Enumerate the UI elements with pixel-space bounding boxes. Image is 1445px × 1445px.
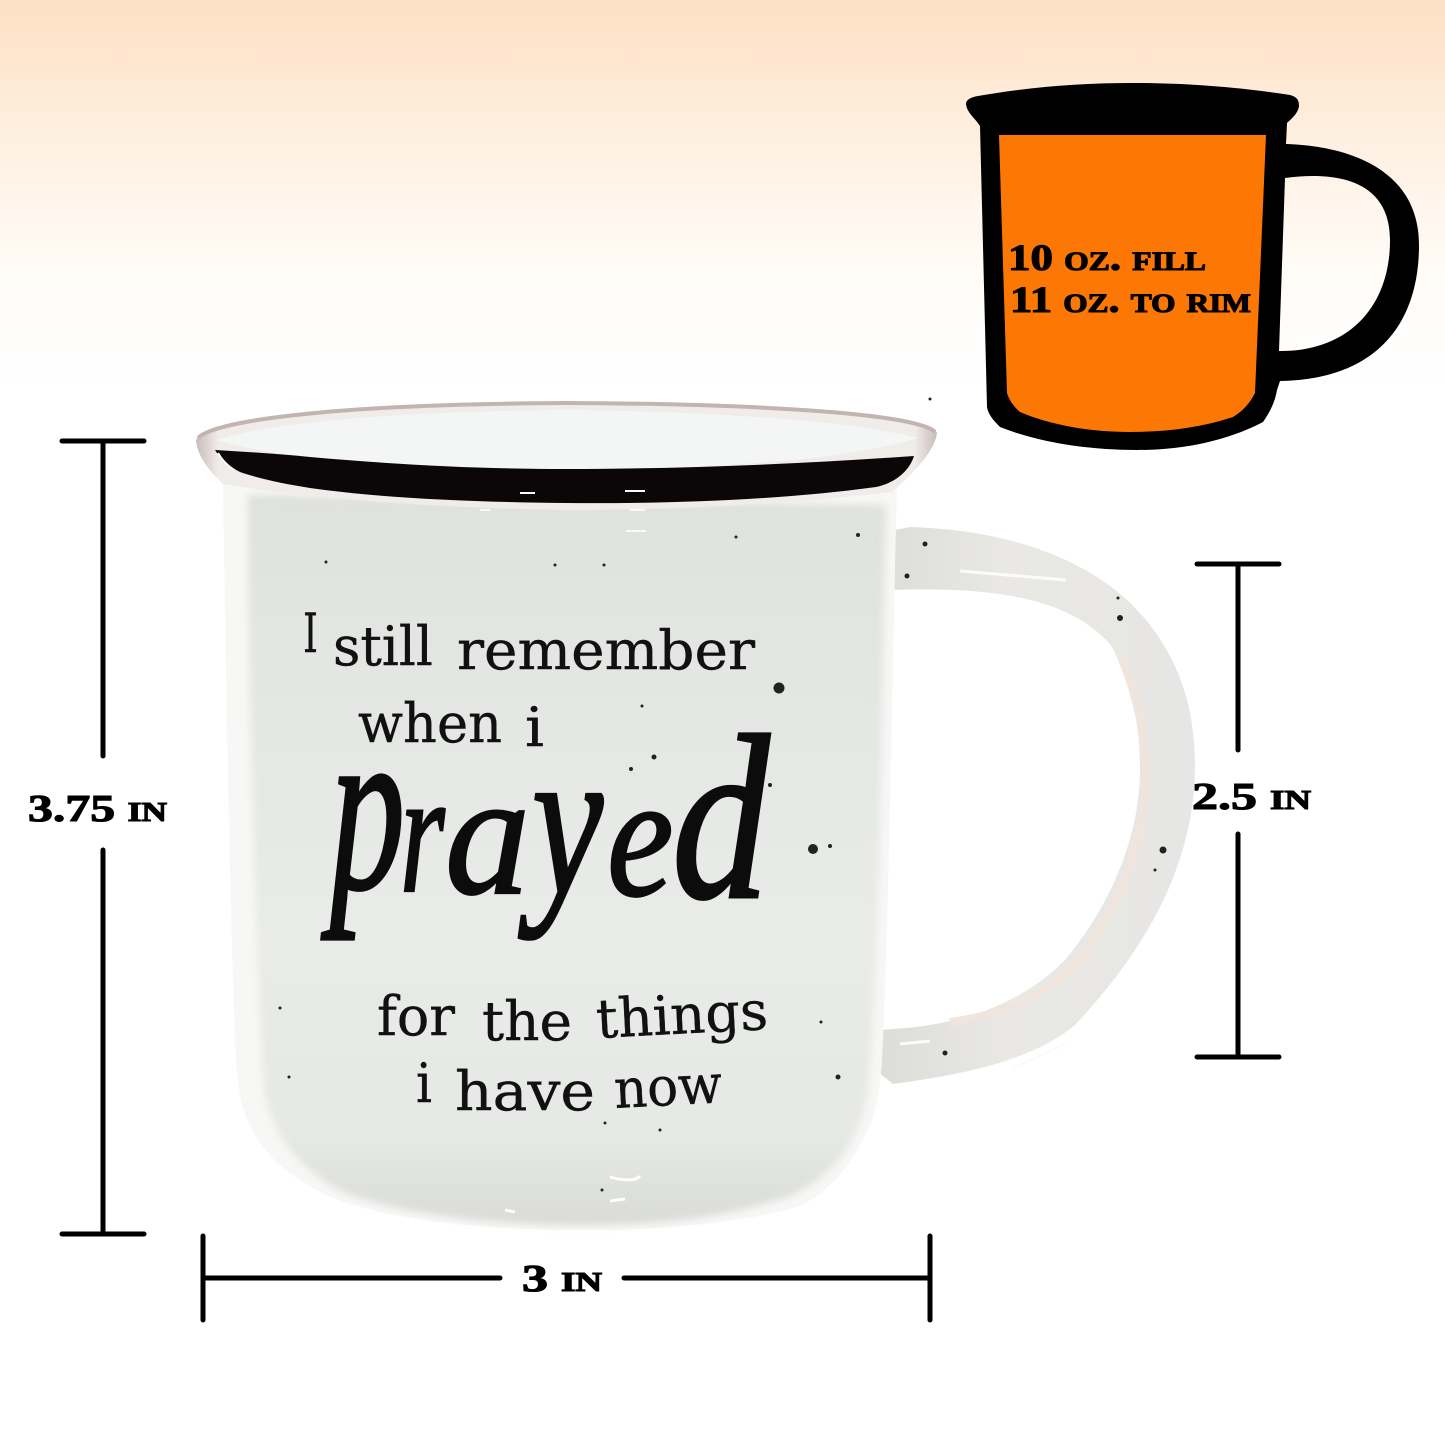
icon silhouette with handle bbox=[966, 83, 1419, 450]
mug handle bbox=[878, 527, 1195, 1084]
mug text: for the things: for bbox=[377, 985, 455, 1048]
mug text: prayed: d bbox=[672, 688, 770, 948]
mug text: I still remember bbox=[303, 602, 755, 682]
height dimension: 3.75 in bbox=[28, 441, 168, 1234]
mug text: I still remember: still bbox=[333, 615, 433, 678]
mug text: prayed: p bbox=[321, 676, 405, 941]
mug text: prayed: r bbox=[400, 736, 446, 930]
mug text: i have now: have bbox=[455, 1060, 595, 1123]
mug text: I still remember: remember bbox=[457, 619, 755, 682]
mug text: for the things: the bbox=[482, 990, 572, 1053]
rim top edge bbox=[198, 403, 935, 438]
mug text: when i: when bbox=[358, 692, 502, 755]
label: 3.75 in: 3.75 in bbox=[28, 788, 168, 830]
handle dimension: 2.5 in bbox=[1192, 564, 1312, 1057]
mug text: prayed: y bbox=[518, 701, 604, 940]
capacity text: 11 oz. to rim: 11 oz. to rim bbox=[1010, 280, 1251, 321]
photo: speckled mug bbox=[196, 398, 1195, 1230]
mug interior bbox=[216, 410, 918, 469]
speckles bbox=[278, 398, 1166, 1192]
label: 3 in: 3 in bbox=[522, 1258, 603, 1300]
handle highlights bbox=[900, 571, 1066, 1068]
capacity text: 10 oz. fill: 10 oz. fill bbox=[1008, 238, 1206, 279]
body highlights bbox=[505, 1176, 640, 1212]
mug rim lip and interior bbox=[196, 403, 937, 510]
mug text: prayed: e bbox=[607, 740, 674, 934]
mug text: when i: i bbox=[525, 696, 544, 759]
mug text: prayed bbox=[321, 676, 770, 948]
mug text: i have now: i bbox=[416, 1052, 432, 1115]
icon orange fill bbox=[999, 135, 1266, 432]
mug text: for the things: things bbox=[594, 979, 769, 1051]
mug body shaded face bbox=[248, 495, 886, 1225]
label: 2.5 in: 2.5 in bbox=[1192, 776, 1312, 818]
mug text: i have now: now bbox=[612, 1052, 724, 1121]
rim highlights bbox=[218, 453, 646, 531]
mug body bbox=[223, 475, 897, 1230]
mug text: I still remember: I bbox=[303, 602, 318, 665]
mug text: prayed: a bbox=[445, 738, 530, 932]
rim black band bbox=[215, 450, 914, 503]
width dimension: 3 in bbox=[203, 1236, 930, 1320]
handle inner shading bbox=[950, 650, 1146, 1022]
mug text: i have now bbox=[416, 1052, 724, 1123]
mug text: for the things bbox=[377, 979, 769, 1053]
capacity mug icon bbox=[966, 83, 1419, 450]
